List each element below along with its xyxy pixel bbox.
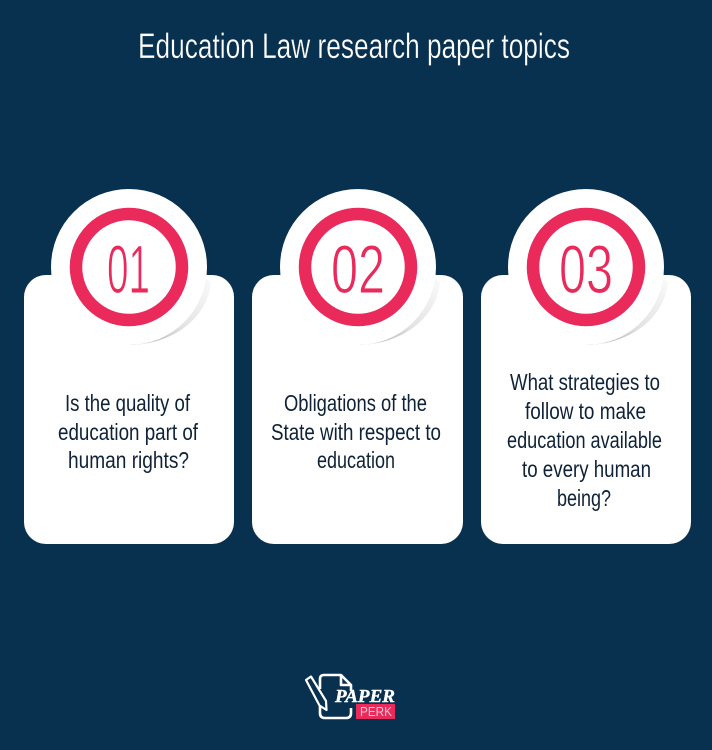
- text 03: being?: [557, 485, 611, 511]
- logo word: PAPER: PAPER: [334, 686, 395, 706]
- number 02: 02: [331, 231, 385, 308]
- text 01: education part of: [58, 419, 198, 445]
- card body 01: [24, 275, 234, 544]
- ring 03: [533, 214, 639, 320]
- text 01: [58, 390, 198, 473]
- badge backing 01: [51, 189, 207, 345]
- curl shadow 03: [586, 275, 668, 345]
- curl shadow 01: [129, 275, 211, 345]
- text 03: What strategies to: [510, 369, 660, 395]
- card body 03: [481, 275, 691, 544]
- ring 01: [76, 214, 182, 320]
- number 01: 01: [107, 231, 150, 308]
- text 02: State with respect to: [271, 419, 441, 445]
- text 03: follow to make: [525, 398, 646, 424]
- text 02: [271, 390, 441, 473]
- logo: [306, 675, 395, 719]
- icon: pencil: [306, 676, 326, 710]
- text 03: to every human: [522, 456, 651, 482]
- text 03: [507, 369, 662, 511]
- text 03: education available: [507, 427, 662, 453]
- text 01: Is the quality of: [65, 390, 190, 416]
- text 02: Obligations of the: [284, 390, 427, 416]
- title: Education Law research paper topics: [138, 27, 570, 66]
- curl shadow 02: [358, 275, 440, 345]
- panel: topic 01: [24, 189, 234, 544]
- panel: topic 02: [252, 189, 463, 544]
- logo tag: PERK: PERK: [360, 705, 393, 719]
- badge backing 03: [508, 189, 664, 345]
- ring 02: [305, 214, 411, 320]
- text 01: human rights?: [68, 447, 189, 473]
- badge backing 02: [280, 189, 436, 345]
- panel: topic 03: [481, 189, 691, 544]
- text 02: education: [317, 447, 395, 473]
- card body 02: [252, 275, 463, 544]
- number 03: 03: [559, 231, 613, 308]
- icon: document: [320, 675, 351, 718]
